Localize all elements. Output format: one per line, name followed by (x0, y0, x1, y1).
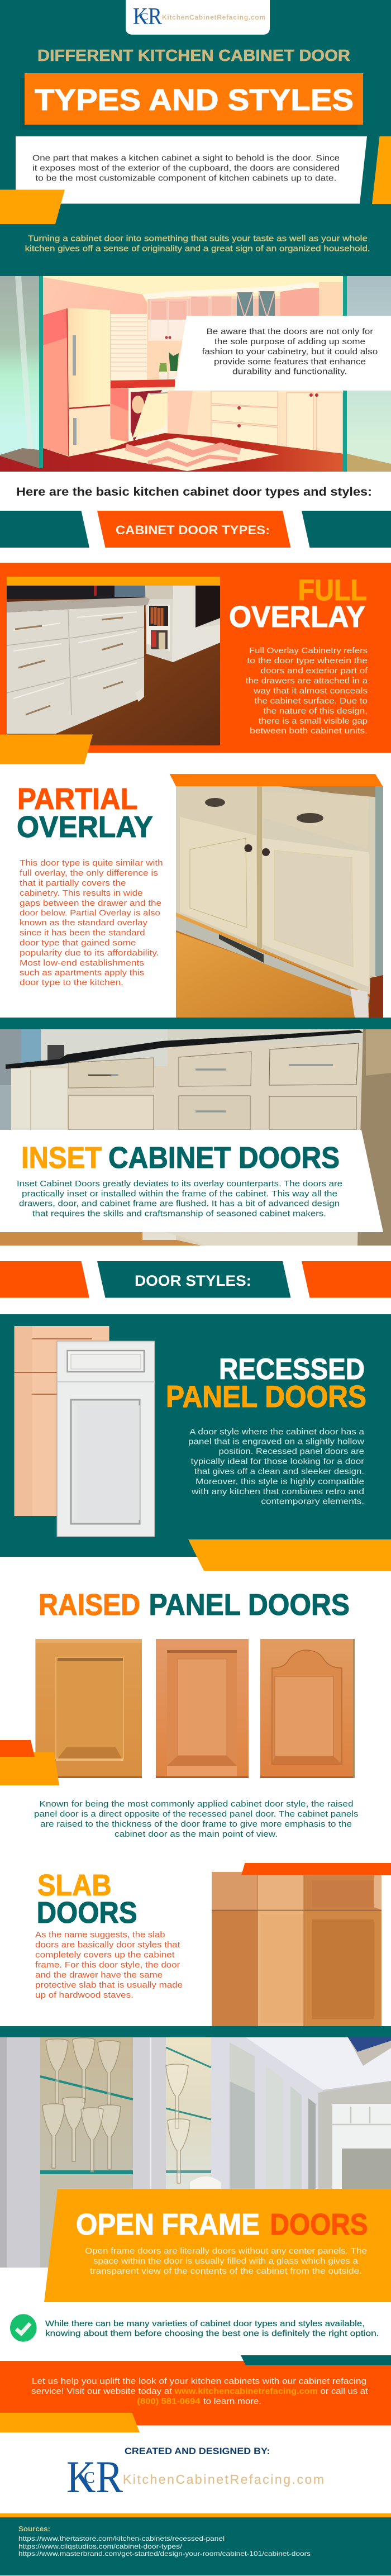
heading: slab doors: SLAB (37, 1869, 112, 1902)
amber photo bar (7, 577, 220, 586)
sources list: https://www.cliqstudios.com/cabinet-door-types/ (18, 2542, 183, 2550)
door photo 2 (156, 1639, 249, 1778)
sources heading: Sources: (18, 2525, 50, 2533)
panel: raised panel doors (0, 1588, 359, 1839)
teal divider bar (0, 2026, 391, 2037)
amber accent (0, 734, 93, 764)
text: slab doors: As the name suggests, the slab (35, 1930, 165, 1940)
panel: open frame doors (0, 2037, 391, 2302)
text: slab doors: completely covers up the cabinet (35, 1950, 175, 1960)
text: raised panel doors (34, 1799, 359, 1839)
text: slab doors: up of hardwood staves. (35, 1990, 133, 2000)
footer logo: C (84, 2469, 95, 2487)
accent left (0, 190, 65, 224)
text: inset cabinet doors (17, 1179, 342, 1218)
callout text: the sole purpose of adding up some (214, 337, 365, 346)
heading: open frame doors: DOORS (270, 2208, 368, 2241)
text: full overlay: way that it almost conceals (253, 686, 368, 696)
logo mark: KR (133, 4, 162, 30)
heading: full overlay (229, 574, 367, 634)
heading: open frame doors (76, 2208, 368, 2241)
back wall (147, 296, 344, 436)
call to action text: or call us at (321, 2387, 369, 2396)
banner label: DOOR STYLES: (135, 1272, 251, 1289)
text: raised panel doors: cabinet door as the main point of view. (115, 1829, 278, 1839)
conclusion text: While there can be many varieties of cabinet door types and styles available, (45, 2319, 365, 2328)
text: recessed panel doors: Moreover, this style is highly compatible (196, 1477, 364, 1486)
photo: full overlay cabinets (7, 586, 220, 745)
footer logo: KR (66, 2451, 123, 2502)
text: recessed panel doors: with any kitchen that combines retro and (191, 1487, 364, 1496)
text: full overlay: Full Overlay Cabinetry refers (249, 646, 368, 655)
text: full overlay: the cabinet surface. Due to (254, 696, 368, 706)
text: recessed panel doors: position. Recessed panel doors are (219, 1447, 364, 1456)
text: inset cabinet doors: drawers, door, and cabinet frame are flushed. It has a bit of advanced design (19, 1199, 340, 1208)
photo: inset cabinets (0, 1029, 391, 1246)
section intro heading: Here are the basic kitchen cabinet door types and styles: (16, 486, 372, 498)
logo wordmark: KitchenCabinetRefacing.com (162, 13, 265, 21)
orange accent (0, 1752, 59, 1785)
text: partial overlay: Most low-end establishments (20, 958, 144, 968)
photo: recessed doors (14, 1326, 155, 1537)
text: slab doors (35, 1930, 183, 2000)
text: recessed panel doors: typically ideal for those looking for a door (191, 1457, 364, 1466)
call to action text: to learn more. (203, 2397, 261, 2406)
heading: inset cabinet doors (21, 1141, 340, 1175)
tagline text: Turning a cabinet door into something that suits your taste as well as your whole (28, 234, 368, 244)
text: partial overlay: known as the standard overlay (20, 918, 148, 928)
call to action text (31, 2377, 369, 2406)
banner: cabinet door types (0, 511, 391, 548)
title line 2: TYPES AND STYLES (35, 83, 354, 117)
fridge (43, 308, 110, 456)
intro text: One part that makes a kitchen cabinet a sight to behold is the door. Since (32, 153, 340, 163)
intro text: to be the most customizable component of kitchen cabinets up to date. (35, 173, 336, 183)
intro text (32, 153, 340, 183)
call to action text: Let us help you uplift the look of your kitchen cabinets with our cabinet refacing (32, 2377, 366, 2386)
text: open frame doors (85, 2246, 367, 2276)
top teal background panel (0, 0, 391, 276)
call to action text: (800) 581-0694 (137, 2397, 201, 2406)
callout text (202, 327, 378, 377)
text: recessed panel doors: A door style where the cabinet door has a (189, 1427, 365, 1437)
door photo 1 (35, 1639, 142, 1778)
sources list (18, 2535, 311, 2558)
orange photo cap (170, 774, 383, 786)
text: slab doors: and the drawer have the same (35, 1970, 163, 1980)
callout text: Be aware that the doors are not only for (207, 327, 373, 336)
text: full overlay: to the door type wherein the (247, 656, 368, 666)
red accent (0, 1740, 35, 1757)
call to action panel (0, 2355, 391, 2432)
banner label: CABINET DOOR TYPES: (116, 523, 270, 537)
photo: slab doors (212, 1872, 382, 2026)
credit heading: CREATED AND DESIGNED BY: (125, 2446, 270, 2456)
panel: slab doors (35, 1863, 391, 2026)
panel: partial overlay (17, 774, 383, 1018)
panel: inset cabinet doors (0, 1029, 391, 1246)
text: raised panel doors: panel door is a direct opposite of the recessed panel door. The cabinet panels (34, 1809, 359, 1819)
left glass overlay (0, 276, 43, 468)
text: partial overlay: door type to the kitchen. (20, 978, 123, 987)
teal accent (241, 2355, 391, 2365)
logo plate (126, 0, 270, 35)
footer wordmark: KitchenCabinetRefacing.com (123, 2472, 324, 2487)
text: partial overlay: full overlay, the only difference is (20, 868, 158, 878)
logo mark: C (140, 11, 149, 22)
kitchen illustration (0, 276, 391, 472)
text: recessed panel doors: panel that is engraved on a slightly hollow (188, 1437, 364, 1446)
title banner (20, 73, 363, 130)
intro panel (0, 136, 391, 224)
text: partial overlay: door type that gained some (20, 938, 136, 948)
amber accent (188, 1539, 391, 1571)
callout text: provide some features that enhance (214, 357, 366, 367)
text: full overlay (246, 646, 368, 735)
text: recessed panel doors: contemporary elements. (261, 1496, 364, 1506)
icon: green check (10, 2314, 37, 2342)
right glass overlay (343, 276, 391, 472)
heading: partial overlay: OVERLAY (17, 810, 153, 844)
text: open frame doors: space within the door is usually filled with a glass which gives a (93, 2256, 359, 2266)
text: inset cabinet doors: Inset Cabinet Doors greatly deviates to its overlay counterparts. The doors are (17, 1179, 342, 1189)
text: slab doors: frame. For this door style, the door (35, 1960, 180, 1970)
heading: recessed panel doors: PANEL DOORS (166, 1379, 366, 1414)
accent right (372, 136, 391, 204)
conclusion text (45, 2319, 379, 2338)
call to action text: service! Visit our website today at (31, 2387, 173, 2396)
heading: inset cabinet doors: CABINET DOORS (108, 1141, 340, 1175)
heading: raised panel doors (39, 1588, 350, 1622)
heading: partial overlay: PARTIAL (17, 782, 137, 816)
text: slab doors: protective slab that is usually made (35, 1980, 183, 1990)
door photo 3 (260, 1639, 355, 1778)
text: slab doors: doors are basically door styles that (35, 1940, 180, 1950)
text: partial overlay: cabinetry. This results in wide (20, 888, 143, 898)
banner: door styles (0, 1261, 391, 1297)
text: partial overlay: since it has been the standard (20, 928, 145, 938)
tagline text (25, 234, 370, 254)
text: full overlay: doors and exterior part of (260, 666, 368, 676)
text: inset cabinet doors: practically inset or installed within the frame of the cabinet. This way all the (22, 1189, 337, 1199)
text: full overlay: there is a small visible gap (259, 716, 368, 726)
text: open frame doors: transparent view of the contents of the cabinet from the outside. (90, 2266, 362, 2276)
text: recessed panel doors (188, 1427, 365, 1506)
sources list: https://www.masterbrand.com/get-started/design-your-room/cabinet-101/cabinet-doors (18, 2550, 311, 2558)
heading: open frame doors: OPEN FRAME (76, 2208, 260, 2241)
sources list: https://www.thertastore.com/kitchen-cabinets/recessed-panel (18, 2535, 225, 2542)
text: partial overlay: This door type is quite similar with (20, 858, 163, 868)
text: raised panel doors: Known for being the most commonly applied cabinet door style, the raised (39, 1799, 353, 1809)
text: full overlay: the nature of this design, (263, 706, 368, 716)
conclusion text: knowing about them before choosing the best one is definitely the right option. (45, 2329, 379, 2338)
red photo cap (241, 1863, 391, 1875)
text: partial overlay: that it partially covers the (20, 878, 126, 888)
photo: glass cabinets (0, 2037, 391, 2268)
call to action text: www.kitchencabinetrefacing.com (174, 2387, 318, 2396)
photo: partial overlay cabinets (176, 786, 383, 1018)
text: partial overlay (20, 858, 163, 987)
heading: raised panel doors: PANEL DOORS (149, 1588, 350, 1622)
rug (95, 438, 279, 471)
heading: slab doors (37, 1869, 137, 1929)
white caption panel (0, 1130, 383, 1232)
upper cabinets (148, 291, 280, 341)
text: recessed panel doors: that gives off a clean and sleeker design. (194, 1467, 364, 1476)
heading: slab doors: DOORS (37, 1896, 137, 1929)
left wall (43, 277, 148, 436)
text: full overlay: between both cabinet units. (250, 726, 368, 735)
panel: recessed panel doors (0, 1314, 391, 1571)
callout text: fashion to your cabinetry, but it could also (202, 347, 378, 357)
heading: recessed panel doors (166, 1353, 366, 1414)
counter and dishwasher (111, 379, 190, 442)
text: full overlay: the drawers are attached in a (246, 676, 368, 686)
conclusion callout (10, 2314, 379, 2342)
text: partial overlay: door below. Partial Overlay is also (20, 909, 160, 918)
callout text: durability and functionality. (232, 367, 347, 377)
heading: raised panel doors: RAISED (39, 1588, 140, 1622)
heading: partial overlay (17, 782, 153, 844)
title line 1: DIFFERENT KITCHEN CABINET DOOR (37, 47, 350, 65)
footer logo (66, 2451, 324, 2502)
amber accent (0, 2413, 140, 2432)
text: raised panel doors: are raised to the thickness of the door frame to give more emphasis to the (40, 1819, 352, 1829)
lower cabinets (168, 391, 344, 454)
heading: recessed panel doors: RECESSED (219, 1353, 365, 1386)
text: partial overlay: such as apartments apply this (20, 968, 144, 978)
floor (0, 433, 344, 472)
heading: full overlay: FULL (298, 574, 367, 607)
window blinds (111, 314, 147, 380)
callout: doors are not only for fashion (174, 316, 391, 391)
crown moulding (142, 282, 319, 300)
text: partial overlay: popularity due to its affordability. (20, 948, 159, 958)
sources panel (0, 2513, 391, 2575)
tagline text: kitchen gives off a sense of originality and a great sign of an organized household. (25, 244, 370, 254)
amber caption panel (44, 2189, 391, 2302)
text: open frame doors: Open frame doors are literally doors without any center panels. The (85, 2246, 367, 2256)
heading: full overlay: OVERLAY (229, 600, 365, 634)
teal divider bar (0, 1018, 391, 1029)
plants (159, 352, 179, 382)
text: partial overlay: gaps between the drawer and the (20, 899, 161, 908)
panel: full overlay (0, 563, 391, 764)
heading: inset cabinet doors: INSET (21, 1141, 102, 1175)
text: inset cabinet doors: that requires the skills and craftsmanship of seasoned cabinet makers. (32, 1209, 326, 1218)
intro text: it exposes most of the exterior of the cupboard, the doors are considered (32, 163, 340, 173)
